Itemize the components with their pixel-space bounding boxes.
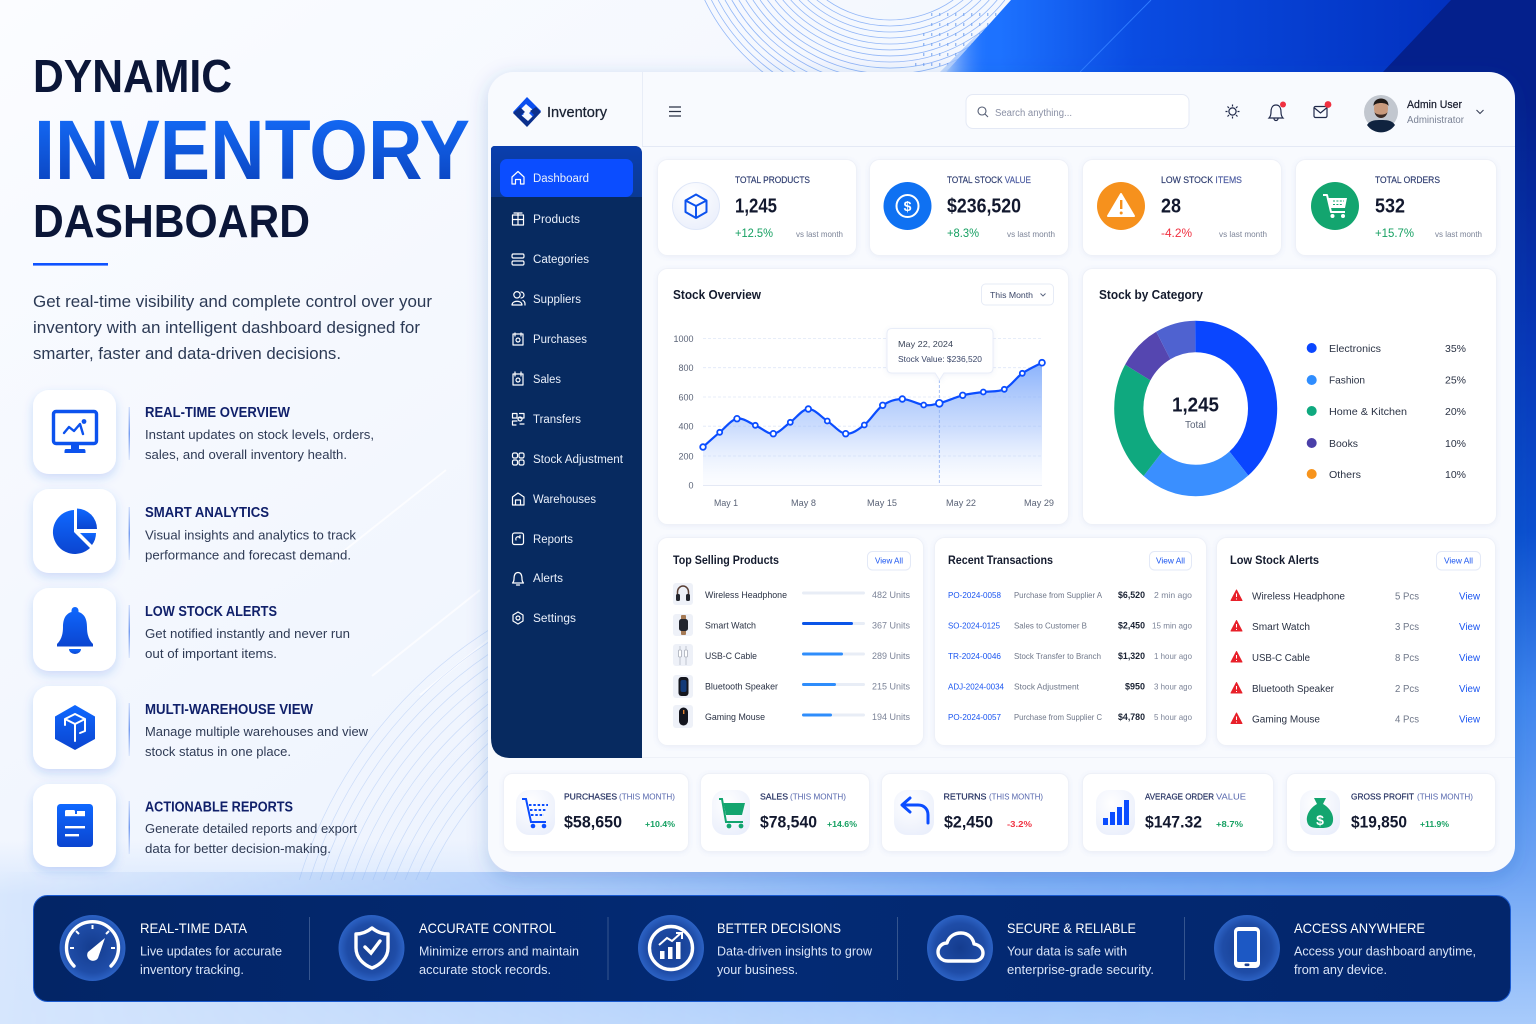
logo name: Inventory bbox=[547, 105, 608, 121]
benefit heading: ACCESS ANYWHERE bbox=[1294, 920, 1425, 936]
transaction row bbox=[948, 620, 1192, 632]
feature body bbox=[145, 724, 369, 759]
icon: menu bbox=[669, 107, 681, 116]
transaction row: PO-2024-0058 bbox=[948, 590, 1001, 600]
legend: 10% bbox=[1445, 469, 1466, 481]
transaction row: $1,320 bbox=[1118, 651, 1145, 662]
stat value: $147.32 bbox=[1145, 814, 1202, 832]
row: wireless headphone: 482 Units bbox=[872, 590, 910, 600]
stat label bbox=[944, 792, 1043, 802]
icon: monitor bbox=[54, 412, 96, 453]
feature body: sales, and overall inventory health. bbox=[145, 447, 347, 462]
kpi change: +8.3% bbox=[947, 226, 979, 240]
row: bluetooth speaker bbox=[673, 675, 910, 698]
transaction row: $4,780 bbox=[1118, 712, 1145, 723]
nav item: sales bbox=[513, 372, 561, 386]
panel: benefits band bbox=[34, 896, 1510, 1002]
nav item: products: Products bbox=[533, 214, 580, 226]
benefit text bbox=[717, 944, 873, 977]
kpi: total orders bbox=[1296, 160, 1496, 256]
row: smart watch bbox=[673, 614, 910, 636]
benefit text: Minimize errors and maintain bbox=[419, 944, 579, 958]
y axis labels: 1000 bbox=[673, 334, 694, 344]
kpi note: vs last month bbox=[1007, 229, 1055, 239]
icon: pie chart bbox=[53, 508, 97, 554]
icon: warning bbox=[1097, 182, 1145, 230]
row: bluetooth speaker: Bluetooth Speaker bbox=[705, 682, 778, 692]
intro paragraph: inventory with an intelligent dashboard designed for bbox=[33, 318, 420, 337]
panel heading: Stock by Category bbox=[1099, 288, 1203, 302]
y axis labels: 600 bbox=[678, 392, 694, 402]
logo bbox=[513, 97, 608, 127]
intro paragraph: smarter, faster and data-driven decisions. bbox=[33, 344, 341, 363]
nav item: settings bbox=[513, 612, 576, 625]
alert row: View bbox=[1459, 653, 1481, 664]
feature body: Visual insights and analytics to track bbox=[145, 528, 357, 542]
icon: theme bbox=[1226, 104, 1240, 118]
panel: stock by category bbox=[1082, 268, 1496, 524]
feature body: out of important items. bbox=[145, 646, 277, 661]
x axis labels bbox=[714, 498, 1054, 508]
transaction row: Stock Transfer to Branch bbox=[1014, 651, 1101, 661]
user role: Administrator bbox=[1407, 115, 1465, 126]
feature: smart analytics bbox=[33, 489, 357, 573]
alert row: USB-C Cable bbox=[1252, 653, 1310, 664]
nav item: sales: Sales bbox=[533, 374, 561, 386]
area series bbox=[703, 363, 1042, 485]
nav item: categories: Categories bbox=[533, 254, 589, 266]
x axis labels: May 8 bbox=[791, 498, 816, 508]
transaction row: Stock Adjustment bbox=[1014, 682, 1080, 692]
benefit heading: SECURE & RELIABLE bbox=[1007, 920, 1136, 936]
alert row: View bbox=[1459, 684, 1481, 695]
button: view all bbox=[1150, 552, 1192, 570]
legend: Fashion bbox=[1329, 374, 1365, 386]
transaction row: Purchase from Supplier A bbox=[1014, 590, 1102, 600]
row: wireless headphone bbox=[673, 583, 910, 605]
row: usb-c cable: USB-C Cable bbox=[705, 651, 757, 662]
user name: Admin User bbox=[1407, 99, 1462, 111]
stat label bbox=[1351, 792, 1473, 802]
row: usb-c cable bbox=[673, 644, 910, 666]
title line: dashboard: DASHBOARD bbox=[33, 195, 310, 247]
transaction row: 2 min ago bbox=[1154, 590, 1192, 600]
nav item: suppliers bbox=[512, 292, 581, 306]
benefit text bbox=[1294, 944, 1476, 977]
panel heading: Low Stock Alerts bbox=[1230, 555, 1319, 567]
nav item: settings: Settings bbox=[533, 613, 576, 625]
data points bbox=[700, 360, 1045, 450]
alert row bbox=[1231, 713, 1481, 726]
feature body bbox=[145, 427, 374, 462]
alert row bbox=[1231, 652, 1481, 664]
icon: dollar: $ bbox=[904, 198, 912, 214]
nav item: reports bbox=[512, 533, 573, 546]
kpi label: LOW STOCK ITEMS bbox=[1161, 175, 1242, 185]
row: bluetooth speaker: 215 Units bbox=[872, 682, 910, 692]
intro paragraph: Get real-time visibility and complete control over your bbox=[33, 292, 432, 311]
stat label: PURCHASES bbox=[564, 792, 617, 802]
icon: hexagon box bbox=[55, 705, 95, 750]
row: wireless headphone: Wireless Headphone bbox=[705, 590, 787, 601]
stat change: +14.6% bbox=[827, 819, 857, 829]
icon: bell bbox=[57, 607, 93, 654]
benefit text: enterprise-grade security. bbox=[1007, 963, 1154, 977]
transaction row: Purchase from Supplier C bbox=[1014, 712, 1102, 722]
legend: Others bbox=[1329, 469, 1361, 481]
nav item: alerts bbox=[512, 572, 563, 585]
tooltip: May 22, 2024 bbox=[898, 339, 953, 349]
alert row bbox=[1231, 620, 1481, 633]
feature body: Instant updates on stock levels, orders, bbox=[145, 427, 374, 442]
transaction row: 15 min ago bbox=[1152, 620, 1192, 630]
stat label bbox=[760, 792, 846, 802]
transaction row: Sales to Customer B bbox=[1014, 620, 1087, 630]
feature heading: LOW STOCK ALERTS bbox=[145, 604, 277, 620]
kpi: total stock value bbox=[870, 160, 1068, 256]
dropdown: This Month bbox=[990, 290, 1033, 300]
benefit text bbox=[140, 944, 282, 977]
alert row: 2 Pcs bbox=[1395, 684, 1419, 695]
benefit: secure and reliable bbox=[927, 915, 1154, 981]
benefit text: Live updates for accurate bbox=[140, 944, 282, 958]
stat change: -3.2% bbox=[1007, 819, 1032, 829]
stat: purchases bbox=[504, 774, 688, 852]
benefit text: Data-driven insights to grow bbox=[717, 944, 873, 958]
nav item: purchases bbox=[513, 333, 587, 346]
icon: bars bbox=[1096, 790, 1135, 835]
nav item: reports: Reports bbox=[533, 534, 573, 546]
line series bbox=[703, 363, 1042, 447]
benefit text: Access your dashboard anytime, bbox=[1294, 944, 1476, 958]
nav item: transfers: Transfers bbox=[533, 414, 581, 426]
panel heading: Stock Overview bbox=[673, 288, 761, 302]
donut center label: Total bbox=[1185, 420, 1206, 431]
transaction row: $6,520 bbox=[1118, 590, 1145, 601]
button: view all: View All bbox=[1444, 556, 1473, 566]
benefit heading: REAL-TIME DATA bbox=[140, 920, 248, 936]
row: gaming mouse: 194 Units bbox=[872, 712, 910, 722]
feature body: Get notified instantly and never run bbox=[145, 626, 350, 641]
kpi value: 28 bbox=[1161, 196, 1181, 218]
alert row bbox=[1231, 682, 1481, 695]
panel: top selling products bbox=[658, 538, 924, 746]
search box bbox=[966, 94, 1189, 128]
kpi value: $236,520 bbox=[947, 196, 1021, 218]
alert row: View bbox=[1459, 592, 1481, 602]
icon: chart ring bbox=[638, 915, 704, 981]
panel: sidebar bbox=[491, 146, 642, 758]
feature heading: SMART ANALYTICS bbox=[145, 505, 269, 521]
alert row: View bbox=[1459, 622, 1481, 633]
stat change: +10.4% bbox=[645, 819, 675, 829]
kpi change: +12.5% bbox=[735, 226, 773, 240]
button: view all: View All bbox=[875, 556, 903, 566]
transaction row: 5 hour ago bbox=[1154, 712, 1192, 722]
legend bbox=[1307, 343, 1466, 481]
button: view all: View All bbox=[1156, 556, 1185, 566]
icon: notifications bbox=[1269, 102, 1286, 120]
stat: sales bbox=[700, 774, 870, 852]
panel: low stock alerts bbox=[1216, 538, 1496, 746]
transaction row bbox=[948, 590, 1192, 601]
icon: report document bbox=[57, 804, 93, 847]
panel: dashboard window bbox=[488, 72, 1515, 872]
feature heading: REAL-TIME OVERVIEW bbox=[145, 405, 290, 421]
alert row: 5 Pcs bbox=[1395, 592, 1419, 602]
y axis labels: 0 bbox=[688, 480, 694, 490]
button: view all bbox=[868, 552, 910, 570]
kpi: low stock items bbox=[1082, 160, 1282, 256]
panel heading: Recent Transactions bbox=[948, 555, 1053, 567]
icon: money bag bbox=[1300, 790, 1340, 835]
stat change: +11.9% bbox=[1420, 819, 1449, 829]
transaction row bbox=[948, 712, 1192, 723]
button: view all bbox=[1436, 552, 1480, 570]
alert row: Bluetooth Speaker bbox=[1252, 684, 1335, 695]
nav item: warehouses: Warehouses bbox=[533, 494, 596, 506]
kpi value: 1,245 bbox=[735, 196, 777, 218]
feature body: stock status in one place. bbox=[145, 744, 291, 759]
legend: 25% bbox=[1445, 374, 1466, 386]
feature body bbox=[145, 528, 357, 562]
feature body: performance and forecast demand. bbox=[145, 548, 351, 562]
feature body bbox=[145, 821, 357, 856]
kpi label: TOTAL STOCK VALUE bbox=[947, 175, 1031, 185]
benefit text: from any device. bbox=[1294, 963, 1387, 977]
feature body: Manage multiple warehouses and view bbox=[145, 724, 369, 739]
transaction row: PO-2024-0057 bbox=[948, 712, 1001, 722]
benefit heading: BETTER DECISIONS bbox=[717, 920, 841, 936]
alert row: Wireless Headphone bbox=[1252, 592, 1345, 602]
nav item: purchases: Purchases bbox=[533, 334, 587, 346]
feature: multi-warehouse view bbox=[33, 686, 369, 769]
benefit text: inventory tracking. bbox=[140, 963, 244, 977]
title line: inventory: INVENTORY bbox=[34, 103, 470, 197]
benefit text: your business. bbox=[717, 963, 798, 977]
row: usb-c cable: 289 Units bbox=[872, 651, 910, 661]
x axis labels: May 1 bbox=[714, 498, 738, 508]
icon: cloud bbox=[927, 915, 993, 981]
kpi note: vs last month bbox=[1435, 229, 1482, 239]
title bbox=[33, 50, 470, 247]
y axis labels: 800 bbox=[678, 363, 694, 373]
transaction row bbox=[948, 651, 1192, 662]
transaction row bbox=[948, 682, 1192, 692]
icon: blue cart bbox=[516, 790, 555, 835]
benefit text: Your data is safe with bbox=[1007, 944, 1127, 958]
transaction row: TR-2024-0046 bbox=[948, 651, 1001, 661]
panel: recent transactions bbox=[934, 538, 1206, 746]
feature: real-time overview bbox=[33, 390, 374, 474]
row: smart watch: 367 Units bbox=[872, 620, 910, 630]
stat label: GROSS PROFIT bbox=[1351, 792, 1414, 802]
alert row bbox=[1231, 590, 1481, 602]
nav item: suppliers: Suppliers bbox=[533, 294, 581, 306]
alert row: 8 Pcs bbox=[1395, 653, 1419, 664]
stat label: (THIS MONTH) bbox=[1417, 792, 1473, 802]
legend: 20% bbox=[1445, 406, 1466, 418]
alert row: 3 Pcs bbox=[1395, 622, 1419, 633]
icon: green cart bbox=[712, 790, 750, 835]
stat label: (THIS MONTH) bbox=[989, 792, 1043, 802]
stat change: +8.7% bbox=[1216, 819, 1243, 829]
dropdown bbox=[982, 284, 1054, 305]
icon: dollar bbox=[884, 182, 932, 230]
stat label: AVERAGE ORDER bbox=[1145, 792, 1214, 802]
benefit: access anywhere bbox=[1214, 915, 1476, 981]
nav item: warehouses bbox=[512, 493, 596, 506]
feature: low stock alerts bbox=[33, 588, 350, 671]
kpi note: vs last month bbox=[1219, 229, 1267, 239]
benefit text bbox=[419, 944, 579, 977]
stat: returns bbox=[882, 774, 1068, 852]
icon: phone bbox=[1214, 915, 1280, 981]
panel heading: Top Selling Products bbox=[673, 555, 779, 567]
stat label: VALUE bbox=[1216, 792, 1246, 802]
title line: dynamic: DYNAMIC bbox=[33, 50, 232, 102]
row: gaming mouse: Gaming Mouse bbox=[705, 712, 765, 723]
row: gaming mouse bbox=[673, 705, 910, 728]
icon: messages bbox=[1314, 101, 1331, 118]
stat: gross profit bbox=[1286, 774, 1496, 852]
kpi: total products bbox=[658, 160, 856, 256]
nav item: transfers bbox=[512, 414, 581, 426]
feature body bbox=[145, 626, 350, 661]
kpi change: +15.7% bbox=[1375, 226, 1414, 240]
benefit: real-time data bbox=[60, 915, 282, 981]
kpi value: 532 bbox=[1375, 196, 1405, 218]
nav item: products bbox=[512, 213, 580, 226]
kpi change: -4.2% bbox=[1161, 226, 1192, 240]
alert row: View bbox=[1459, 714, 1481, 726]
transaction row: ADJ-2024-0034 bbox=[948, 682, 1004, 692]
nav item: alerts: Alerts bbox=[533, 573, 563, 585]
legend: Electronics bbox=[1329, 343, 1381, 355]
legend: 10% bbox=[1445, 438, 1466, 450]
y axis labels: 400 bbox=[678, 422, 694, 432]
legend: 35% bbox=[1445, 343, 1466, 355]
benefit text bbox=[1007, 944, 1154, 977]
stat value: $78,540 bbox=[760, 814, 817, 832]
kpi label: TOTAL PRODUCTS bbox=[735, 175, 810, 185]
alert row: Gaming Mouse bbox=[1252, 714, 1320, 726]
icon: money bag: $ bbox=[1316, 812, 1324, 828]
y axis labels bbox=[673, 334, 694, 490]
stat: average order value bbox=[1082, 774, 1274, 852]
kpi note: vs last month bbox=[796, 229, 843, 239]
icon: return arrow bbox=[894, 790, 934, 835]
transaction row: SO-2024-0125 bbox=[948, 620, 1000, 630]
stat label: SALES bbox=[760, 792, 788, 802]
feature heading: ACTIONABLE REPORTS bbox=[145, 800, 293, 816]
user profile bbox=[1364, 95, 1484, 132]
x axis labels: May 22 bbox=[946, 498, 976, 508]
line chart bbox=[673, 328, 1054, 508]
donut chart bbox=[1129, 337, 1263, 480]
kpi label: TOTAL ORDERS bbox=[1375, 175, 1440, 185]
transaction row: 3 hour ago bbox=[1154, 682, 1192, 692]
row: smart watch: Smart Watch bbox=[705, 620, 756, 632]
search box: Search anything... bbox=[995, 108, 1072, 119]
feature: actionable reports bbox=[33, 784, 357, 867]
nav item: dashboard active: Dashboard bbox=[533, 173, 589, 185]
avatar bbox=[1364, 95, 1398, 132]
alert row: 4 Pcs bbox=[1395, 714, 1419, 726]
stat value: $2,450 bbox=[944, 814, 993, 832]
icon: shield bbox=[338, 915, 404, 981]
nav item: dashboard active bbox=[500, 159, 633, 197]
legend: Home & Kitchen bbox=[1329, 406, 1407, 418]
icon: cart bbox=[1311, 182, 1359, 230]
benefit heading: ACCURATE CONTROL bbox=[419, 920, 556, 936]
tooltip bbox=[887, 328, 993, 380]
nav item: stock adjustment: Stock Adjustment bbox=[533, 454, 624, 466]
benefit: better decisions bbox=[638, 915, 873, 981]
panel: stock overview bbox=[658, 268, 1068, 524]
stat value: $58,650 bbox=[564, 814, 622, 832]
feature body: data for better decision-making. bbox=[145, 841, 331, 856]
feature body: Generate detailed reports and export bbox=[145, 821, 357, 836]
stat label bbox=[564, 792, 675, 802]
stat label: (THIS MONTH) bbox=[790, 792, 846, 802]
stat label: (THIS MONTH) bbox=[619, 792, 675, 802]
stat label: RETURNS bbox=[944, 792, 987, 802]
transaction row: 1 hour ago bbox=[1154, 651, 1192, 661]
tooltip: Stock Value: $236,520 bbox=[898, 355, 983, 364]
transaction row: $950 bbox=[1125, 682, 1145, 692]
alert row: Smart Watch bbox=[1252, 622, 1310, 633]
x axis labels: May 15 bbox=[867, 498, 897, 508]
transaction row: $2,450 bbox=[1118, 620, 1145, 632]
benefit: accurate control bbox=[338, 915, 579, 981]
icon: box bbox=[672, 182, 720, 230]
stat value: $19,850 bbox=[1351, 814, 1407, 832]
icon: logo mark bbox=[513, 97, 541, 127]
donut center value: 1,245 bbox=[1172, 394, 1219, 416]
feature heading: MULTI-WAREHOUSE VIEW bbox=[145, 702, 313, 718]
legend: Books bbox=[1329, 438, 1358, 450]
icon: gauge bbox=[60, 915, 126, 981]
x axis labels: May 29 bbox=[1024, 498, 1054, 508]
y axis labels: 200 bbox=[678, 452, 694, 462]
intro paragraph bbox=[33, 292, 432, 363]
benefit text: accurate stock records. bbox=[419, 963, 551, 977]
